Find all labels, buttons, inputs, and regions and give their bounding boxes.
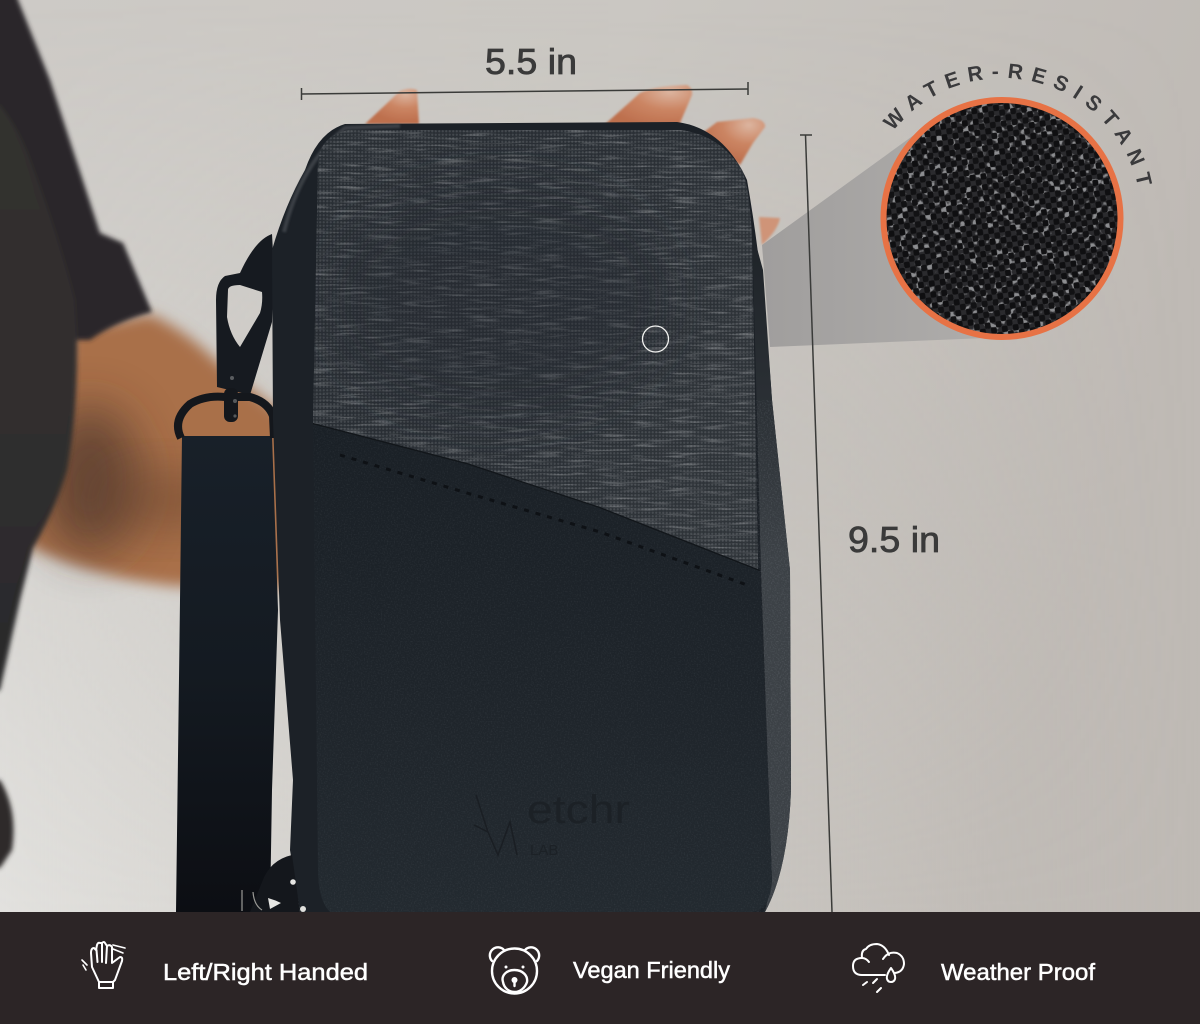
- photo: dark shirt and torso: [0, 0, 152, 868]
- water-resistant curved label: WATER-RESISTANT: [882, 64, 1152, 184]
- pouch side band highlights: [284, 126, 791, 912]
- icon: waving hand: [82, 942, 125, 988]
- embossed pouch logo: LAB: [530, 842, 558, 859]
- height dimension line: [800, 135, 832, 912]
- pouch leather front pocket: [313, 423, 772, 912]
- height label: 9.5 in: [848, 519, 940, 560]
- pouch heather fabric panel: [300, 120, 770, 580]
- icon: rain cloud: [853, 944, 904, 992]
- bottom feature bar: [0, 912, 1200, 1024]
- lower hardware: [242, 855, 306, 912]
- icon: bear face: [490, 947, 539, 994]
- photo: fingers behind pouch: [365, 85, 780, 245]
- photo: forearm: [25, 314, 290, 588]
- magnified fabric circle: [880, 96, 1124, 342]
- metal clip and D-ring: [178, 234, 274, 438]
- label: weather proof: Weather Proof: [941, 959, 1096, 985]
- label: vegan friendly: Vegan Friendly: [573, 957, 731, 983]
- label: left/right handed: Left/Right Handed: [163, 959, 368, 985]
- width dimension line: [301, 82, 748, 100]
- travel pouch body: [272, 122, 791, 912]
- embossed pouch logo: [474, 788, 630, 859]
- shoulder strap: [176, 436, 278, 912]
- fabric sample marker: [642, 326, 668, 352]
- embossed pouch logo: etchr: [527, 788, 630, 832]
- callout shadow cone: [762, 127, 1010, 347]
- width label: 5.5 in: [485, 41, 577, 82]
